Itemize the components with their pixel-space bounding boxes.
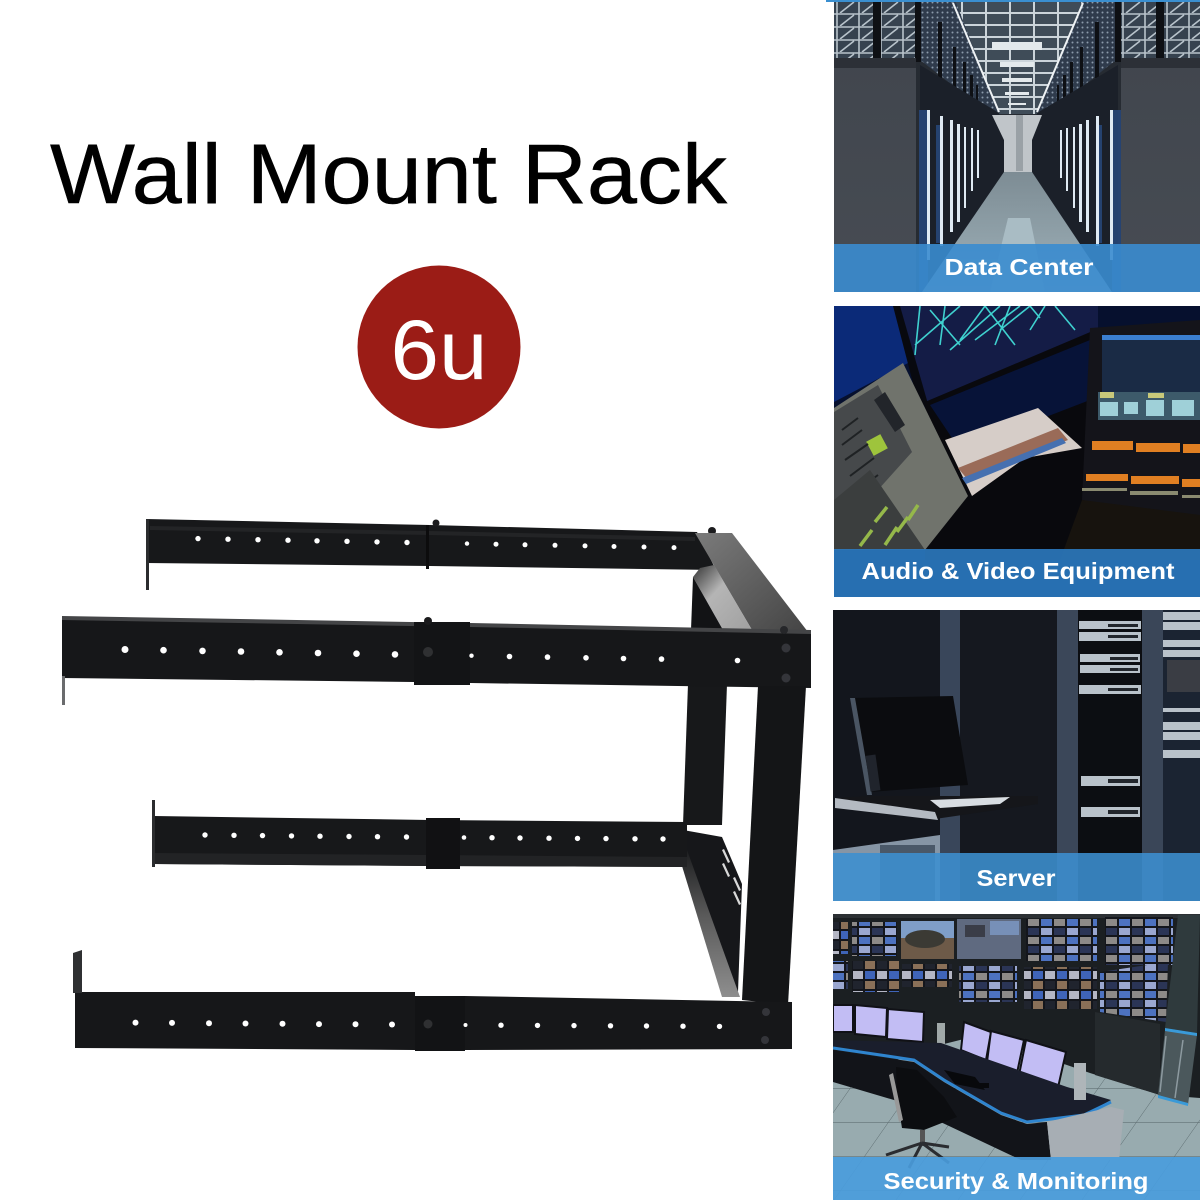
panel: data center [834,0,1200,292]
banner: security and monitoring: Security & Monitoring [884,1168,1148,1194]
6u badge: 6u [390,303,488,397]
monitor wall: landscape photo screen [901,921,954,959]
panel: security and monitoring [833,914,1200,1200]
top accent strip [826,0,1200,2]
front post [742,686,806,1005]
banner: audio and video equipment [834,549,1200,597]
banner: data center: Data Center [944,254,1094,280]
title: Wall Mount Rack [50,127,728,221]
middle back rail [152,800,687,869]
back top rail [146,519,716,590]
panel: audio and video equipment [834,306,1200,597]
banner: server [833,853,1200,901]
6u badge [358,266,520,428]
front top rail [62,616,811,705]
panel: server [833,610,1200,901]
banner: server: Server [976,865,1056,891]
banner: security and monitoring [833,1157,1200,1200]
banner: audio and video equipment: Audio & Video Equipment [862,558,1175,584]
banner: data center [834,244,1200,292]
monitor wall: wide screen [957,919,1021,959]
side brace and back post [682,533,808,997]
bottom front rail [73,950,792,1051]
product photo: wall mount rack [62,519,811,1051]
